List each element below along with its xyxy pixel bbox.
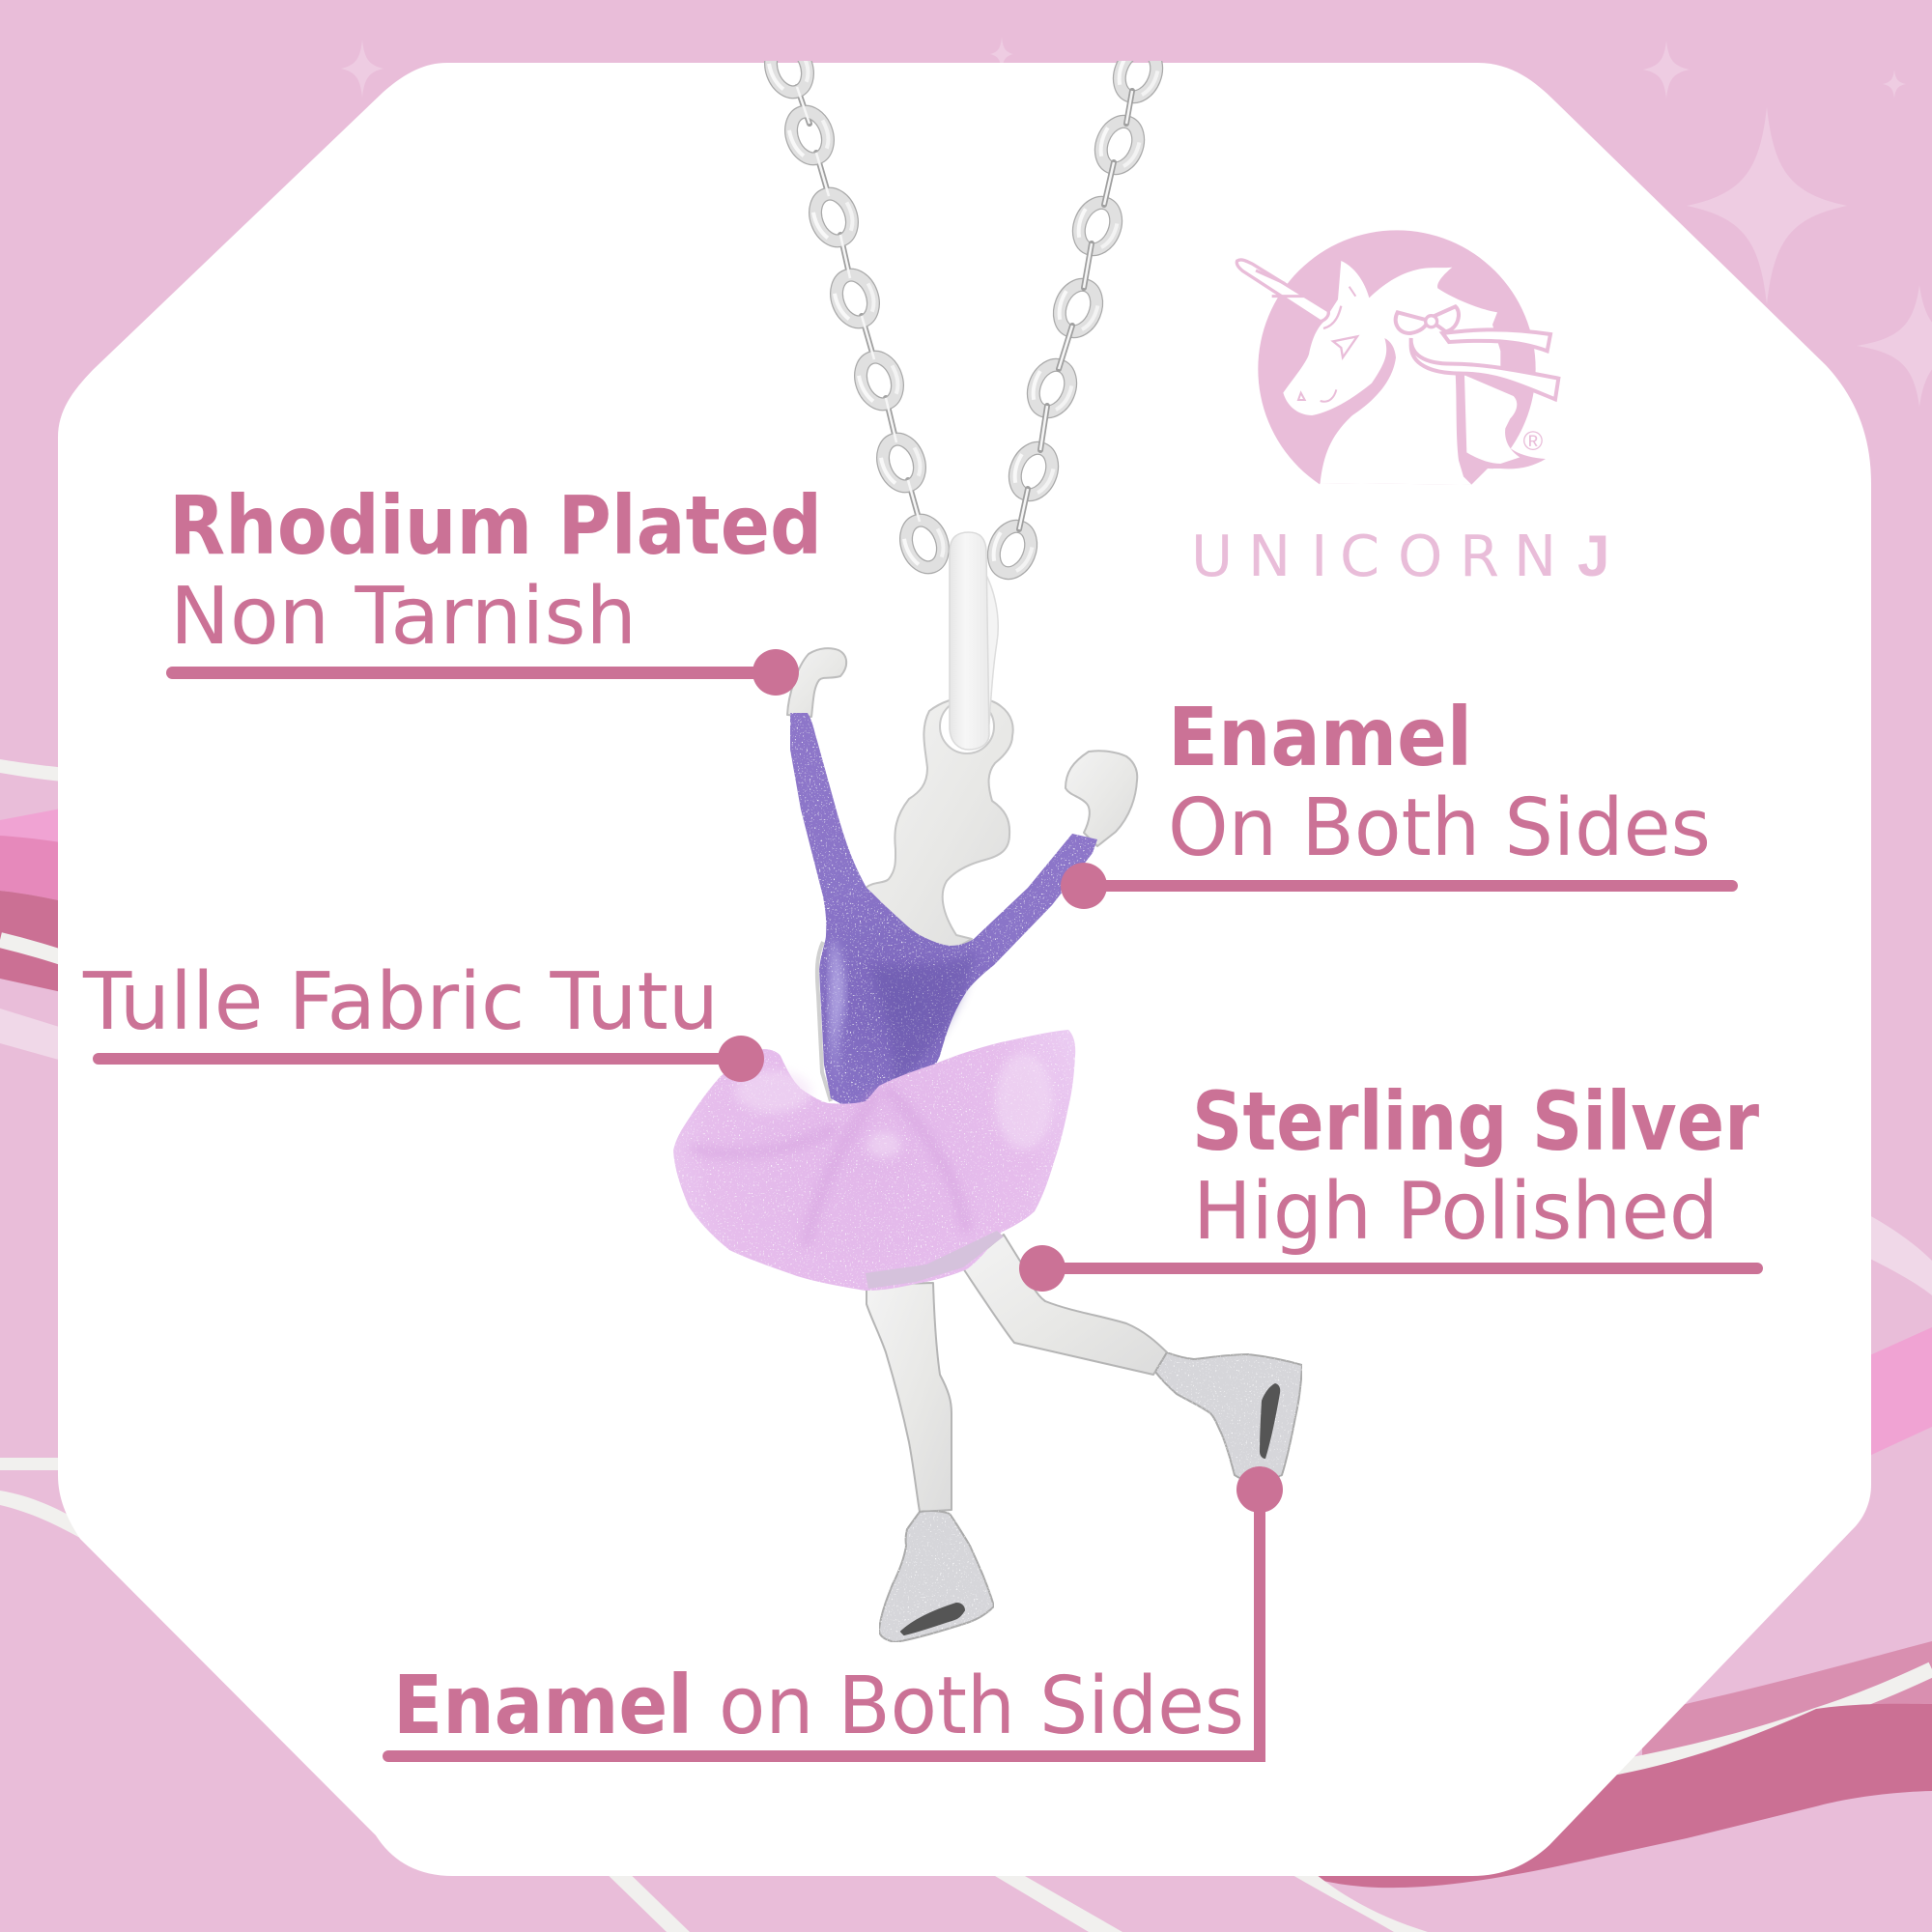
- logo: brand name final letter: J: [1577, 524, 1609, 588]
- callout: enamel on both sides: [1061, 690, 1738, 909]
- tutu underlayer: [866, 1231, 1004, 1289]
- callout: tulle fabric tutu: [82, 956, 764, 1082]
- enamel shading: [869, 952, 976, 1092]
- left wave bands: [0, 759, 97, 1548]
- silver raised hand: [787, 648, 846, 717]
- callout: sterling silver: Sterling Silver: [1192, 1074, 1759, 1169]
- silver hair and chest: [866, 697, 1013, 952]
- callout: enamel on boots: [383, 1466, 1283, 1762]
- callout: enamel on boots: on Both Sides: [719, 1661, 1244, 1752]
- right wave bands: [1855, 1208, 1932, 1463]
- sparkles: [341, 37, 1932, 407]
- purple enamel leotard: [790, 713, 1097, 1124]
- enamel highlight: [830, 937, 845, 1087]
- left boot: [879, 1511, 994, 1642]
- logo: unicorn emblem: [1236, 230, 1558, 512]
- bottom wave bands: [597, 1641, 1932, 1932]
- bale: [940, 532, 998, 753]
- right blade: [1260, 1383, 1280, 1459]
- callout: sterling silver: [1019, 1074, 1763, 1292]
- left leg: [867, 1283, 952, 1512]
- callout: enamel on both sides: Enamel: [1168, 690, 1472, 784]
- callout: rhodium plated: Non Tarnish: [170, 571, 637, 663]
- silver torso edge: [817, 942, 831, 1101]
- silver other hand: [1065, 751, 1137, 846]
- pendant: skater figure: [673, 648, 1302, 1642]
- left blade: [901, 1604, 964, 1634]
- tulle tutu: [673, 1030, 1075, 1291]
- callout: tulle fabric tutu: Tulle Fabric Tutu: [82, 956, 719, 1048]
- chain: right strand: [986, 44, 1164, 579]
- right leg: [963, 1235, 1167, 1375]
- logo: brand name: UNICORN: [1191, 523, 1556, 589]
- right boot: [1155, 1352, 1302, 1488]
- tutu folds: [696, 1092, 966, 1241]
- callout: enamel on both sides: On Both Sides: [1168, 782, 1711, 874]
- callout: rhodium plated: Rhodium Plated: [169, 478, 822, 573]
- callout: sterling silver: High Polished: [1193, 1166, 1719, 1258]
- tutu light patches: [734, 1053, 1053, 1158]
- callout: enamel on boots: Enamel: [393, 1658, 693, 1752]
- logo: unicorn emblem: ®: [1523, 426, 1544, 456]
- chain: left strand: [764, 40, 950, 573]
- callout: rhodium plated: [166, 478, 822, 696]
